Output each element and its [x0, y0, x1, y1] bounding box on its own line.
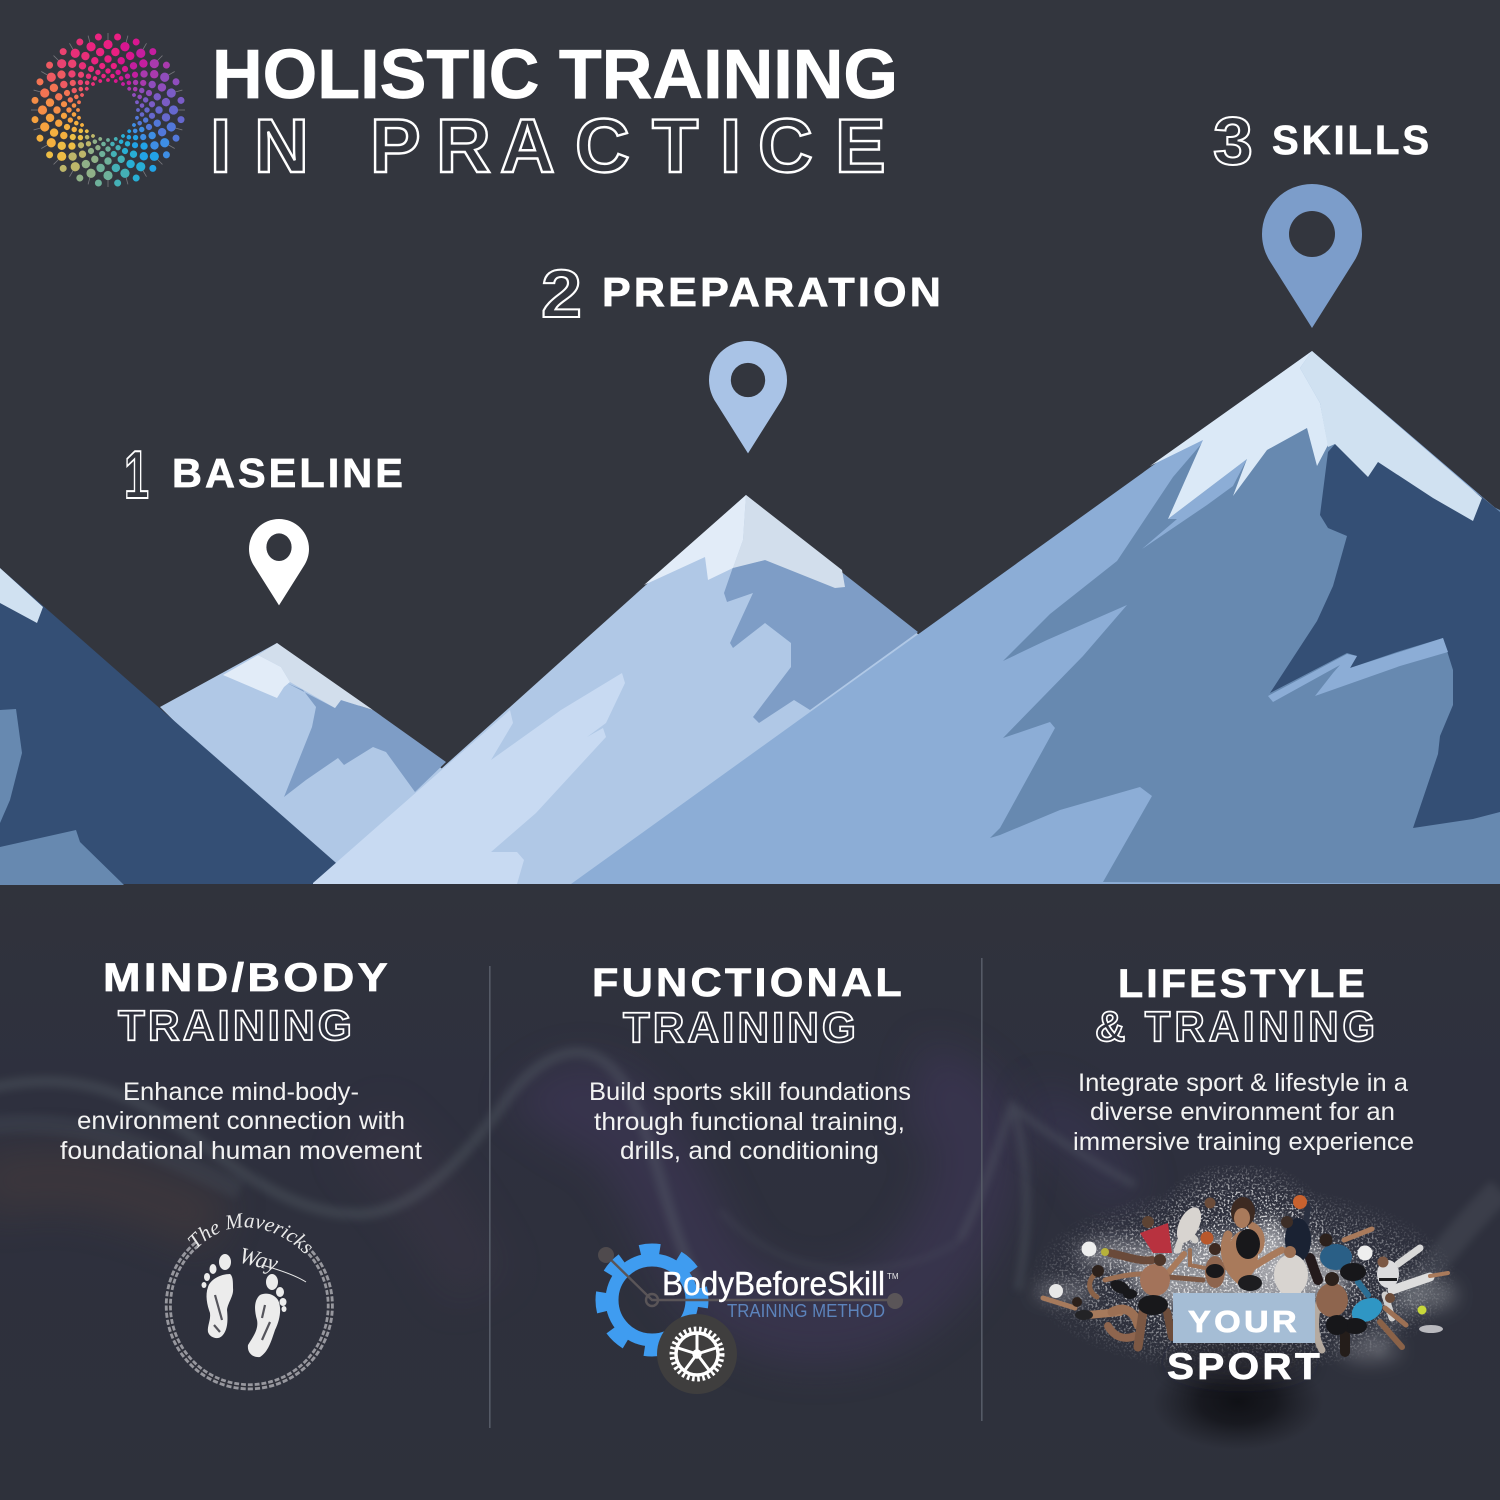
text: mind/body description: environment connection with: [77, 1107, 405, 1135]
text: functional description: through functional training,: [594, 1108, 905, 1136]
step label: 1 baseline: [124, 437, 406, 513]
step label: 2 preparation: 2: [541, 256, 582, 332]
heading: functional training: [592, 961, 905, 1052]
icon: map pin 1: [249, 519, 309, 605]
logo: body before skill: TRAINING METHOD: [727, 1301, 885, 1321]
step label: 3 skills: SKILLS: [1272, 117, 1432, 163]
title: HOLISTIC TRAINING: [212, 35, 898, 113]
text: lifestyle description: immersive training experience: [1073, 1128, 1414, 1156]
mountain 1: [160, 643, 470, 880]
text: mind/body description: foundational human movement: [60, 1137, 422, 1165]
image: your sport athletes collage: YOUR: [1188, 1304, 1300, 1339]
step label: 2 preparation: [541, 256, 944, 332]
text: functional description: [589, 1078, 911, 1165]
step label: 3 skills: 3: [1213, 103, 1253, 179]
text: functional description: drills, and conditioning: [620, 1137, 879, 1165]
step label: 1 baseline: 1: [124, 437, 149, 513]
step label: 1 baseline: BASELINE: [172, 450, 406, 496]
image: your sport athletes collage: [1025, 1165, 1465, 1450]
heading: functional training: TRAINING: [623, 1004, 859, 1052]
icon: map pin 3: [1262, 184, 1362, 328]
text: functional description: Build sports skill foundations: [589, 1078, 911, 1106]
heading: lifestyle and training: [1095, 962, 1379, 1051]
heading: lifestyle and training: & TRAINING: [1095, 1003, 1379, 1051]
divider left: [489, 966, 491, 1428]
logo: body before skill: [590, 1238, 903, 1394]
divider right: [981, 958, 983, 1421]
logo: sunburst: [30, 32, 186, 188]
image: your sport athletes collage: SPORT: [1167, 1346, 1323, 1387]
logo: the mavericks way: Way: [237, 1243, 281, 1276]
heading: mind/body training: [103, 956, 391, 1050]
title: IN PRACTICE: [210, 104, 886, 189]
mountain 2: [313, 495, 950, 884]
title: [210, 35, 898, 189]
logo: the mavericks way: The Mavericks: [188, 1213, 312, 1254]
logo: body before skill: TM: [887, 1272, 899, 1281]
text: lifestyle description: [1073, 1069, 1414, 1156]
step label: 2 preparation: PREPARATION: [602, 269, 944, 315]
step label: 3 skills: [1213, 103, 1432, 179]
text: mind/body description: [60, 1078, 422, 1165]
heading: functional training: FUNCTIONAL: [592, 961, 905, 1005]
text: mind/body description: Enhance mind-body-: [123, 1078, 359, 1106]
heading: mind/body training: TRAINING: [118, 1002, 355, 1050]
heading: lifestyle and training: LIFESTYLE: [1118, 962, 1368, 1006]
logo: body before skill: BodyBeforeSkill: [662, 1265, 885, 1302]
mountain left dark: [0, 568, 360, 885]
text: lifestyle description: Integrate sport & lifestyle in a: [1078, 1069, 1408, 1097]
logo: the mavericks way: [164, 1213, 334, 1390]
lower panel background with waves: [0, 884, 1500, 1500]
text: lifestyle description: diverse environment for an: [1090, 1098, 1395, 1126]
icon: map pin 2: [709, 341, 787, 453]
mountain 3: [571, 351, 1500, 884]
heading: mind/body training: MIND/BODY: [103, 956, 391, 1000]
